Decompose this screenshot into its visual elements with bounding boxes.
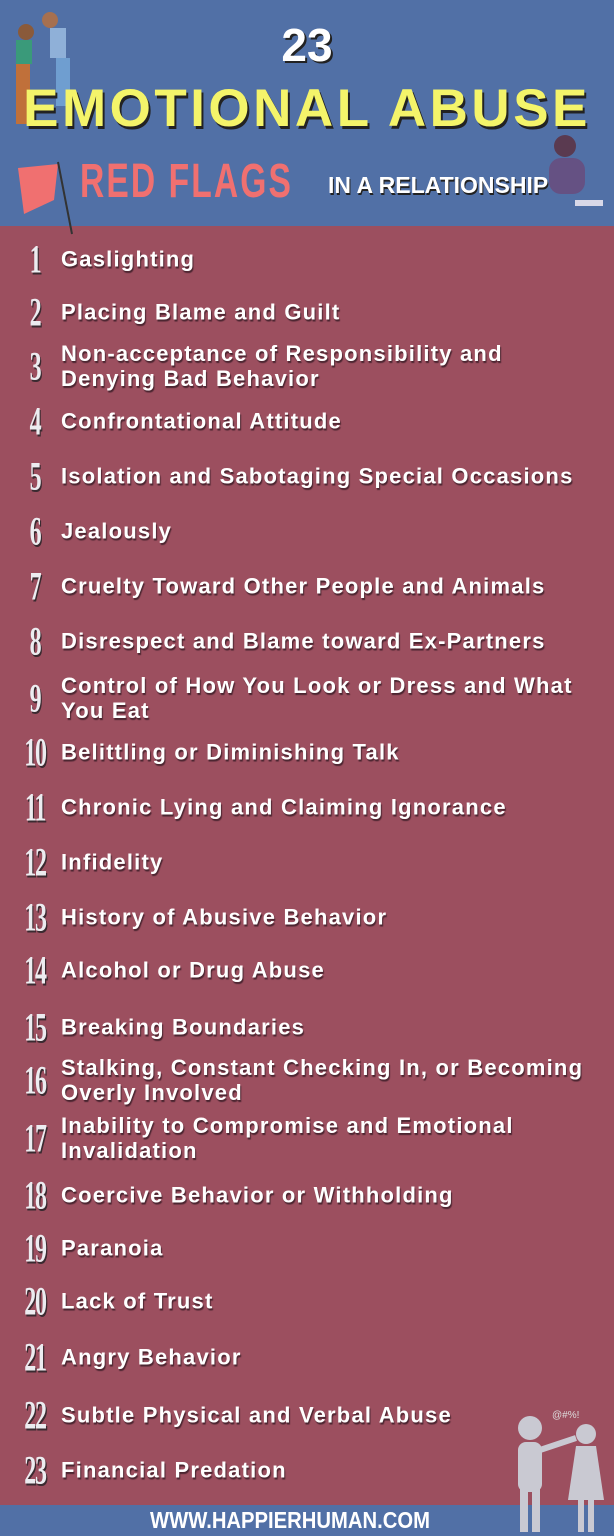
item 21 <box>24 1334 242 1380</box>
item 2 <box>30 290 340 334</box>
item 8: 8 <box>30 618 40 664</box>
item 5: 5 <box>30 454 40 498</box>
item 7: 7 <box>30 564 40 608</box>
item 15: 15 <box>24 1004 46 1050</box>
illustration: shouting figures <box>518 1410 604 1532</box>
item 15 <box>24 1004 305 1050</box>
item 2: Placing Blame and Guilt <box>61 300 340 324</box>
item 14: Alcohol or Drug Abuse <box>61 958 325 982</box>
item 6: Jealously <box>61 518 172 544</box>
item 1: Gaslighting <box>61 246 195 272</box>
item 17: Invalidation <box>61 1138 198 1163</box>
subtitle red flags: RED FLAGS <box>80 155 293 208</box>
item 6: 6 <box>30 508 40 554</box>
header band <box>0 0 614 226</box>
item 13 <box>24 894 388 940</box>
item 8 <box>30 618 546 664</box>
item 15: Breaking Boundaries <box>61 1014 305 1040</box>
item 17: Inability to Compromise and Emotional <box>61 1113 514 1138</box>
item 5 <box>30 454 574 498</box>
item 19: 19 <box>24 1226 46 1270</box>
item 3: 3 <box>30 344 40 388</box>
item 16: 16 <box>24 1058 46 1102</box>
item 17 <box>24 1113 514 1163</box>
item 6 <box>30 508 172 554</box>
title main: EMOTIONAL ABUSE <box>23 79 591 138</box>
item 21: Angry Behavior <box>61 1344 242 1370</box>
item 9: 9 <box>30 676 40 720</box>
item 7 <box>30 564 545 608</box>
item 3 <box>30 341 503 393</box>
item 23: Financial Predation <box>61 1458 287 1482</box>
item 1 <box>30 236 195 282</box>
item 16: Stalking, Constant Checking In, or Becoming <box>61 1055 583 1080</box>
item 1: 1 <box>30 236 40 282</box>
title number: 23 <box>281 19 333 71</box>
subtitle in a relationship: IN A RELATIONSHIP <box>328 172 548 198</box>
item 17: 17 <box>24 1116 46 1160</box>
item 23: 23 <box>24 1448 46 1492</box>
illustration: sad woman <box>549 135 603 206</box>
item 3: Denying Bad Behavior <box>61 366 320 391</box>
item 4 <box>30 398 342 444</box>
item 11 <box>25 784 507 830</box>
item 19: Paranoia <box>61 1236 164 1260</box>
item 10: Belittling or Diminishing Talk <box>61 740 400 764</box>
icon: red flag <box>18 162 73 234</box>
item 2: 2 <box>30 290 40 334</box>
item 20 <box>24 1278 214 1324</box>
item 4: Confrontational Attitude <box>61 408 342 434</box>
item 12: 12 <box>24 840 46 884</box>
item 19 <box>24 1226 164 1270</box>
item 21: 21 <box>24 1334 46 1380</box>
item 11: 11 <box>25 784 45 830</box>
item 20: Lack of Trust <box>61 1288 214 1314</box>
item 14: 14 <box>24 948 46 992</box>
illustration: arguing couple <box>16 12 70 124</box>
illustration: shouting figures: @#%! <box>552 1410 579 1421</box>
item 10: 10 <box>24 730 46 774</box>
item 22 <box>24 1392 452 1438</box>
item 16: Overly Involved <box>61 1080 243 1105</box>
item 3: Non-acceptance of Responsibility and <box>61 341 503 366</box>
item 7: Cruelty Toward Other People and Animals <box>61 574 545 598</box>
item 11: Chronic Lying and Claiming Ignorance <box>61 794 507 820</box>
item 20: 20 <box>24 1278 46 1324</box>
item 5: Isolation and Sabotaging Special Occasions <box>61 464 574 488</box>
item 12: Infidelity <box>61 850 163 874</box>
item 18 <box>24 1172 454 1218</box>
item 18: 18 <box>24 1172 46 1218</box>
item 9: You Eat <box>61 698 150 723</box>
item 8: Disrespect and Blame toward Ex-Partners <box>61 628 546 654</box>
item 9 <box>30 673 573 723</box>
item 12 <box>24 840 164 884</box>
item 14 <box>24 948 325 992</box>
item 9: Control of How You Look or Dress and What <box>61 673 573 698</box>
item 22: 22 <box>24 1392 46 1438</box>
item 23 <box>24 1448 287 1492</box>
item 10 <box>24 730 400 774</box>
footer url: WWW.HAPPIERHUMAN.COM <box>150 1507 430 1533</box>
item 13: 13 <box>24 894 46 940</box>
item 13: History of Abusive Behavior <box>61 904 387 930</box>
item 4: 4 <box>30 398 40 444</box>
item 22: Subtle Physical and Verbal Abuse <box>61 1402 452 1428</box>
item 18: Coercive Behavior or Withholding <box>61 1182 454 1208</box>
footer band <box>0 1505 614 1536</box>
item 16 <box>24 1055 583 1107</box>
